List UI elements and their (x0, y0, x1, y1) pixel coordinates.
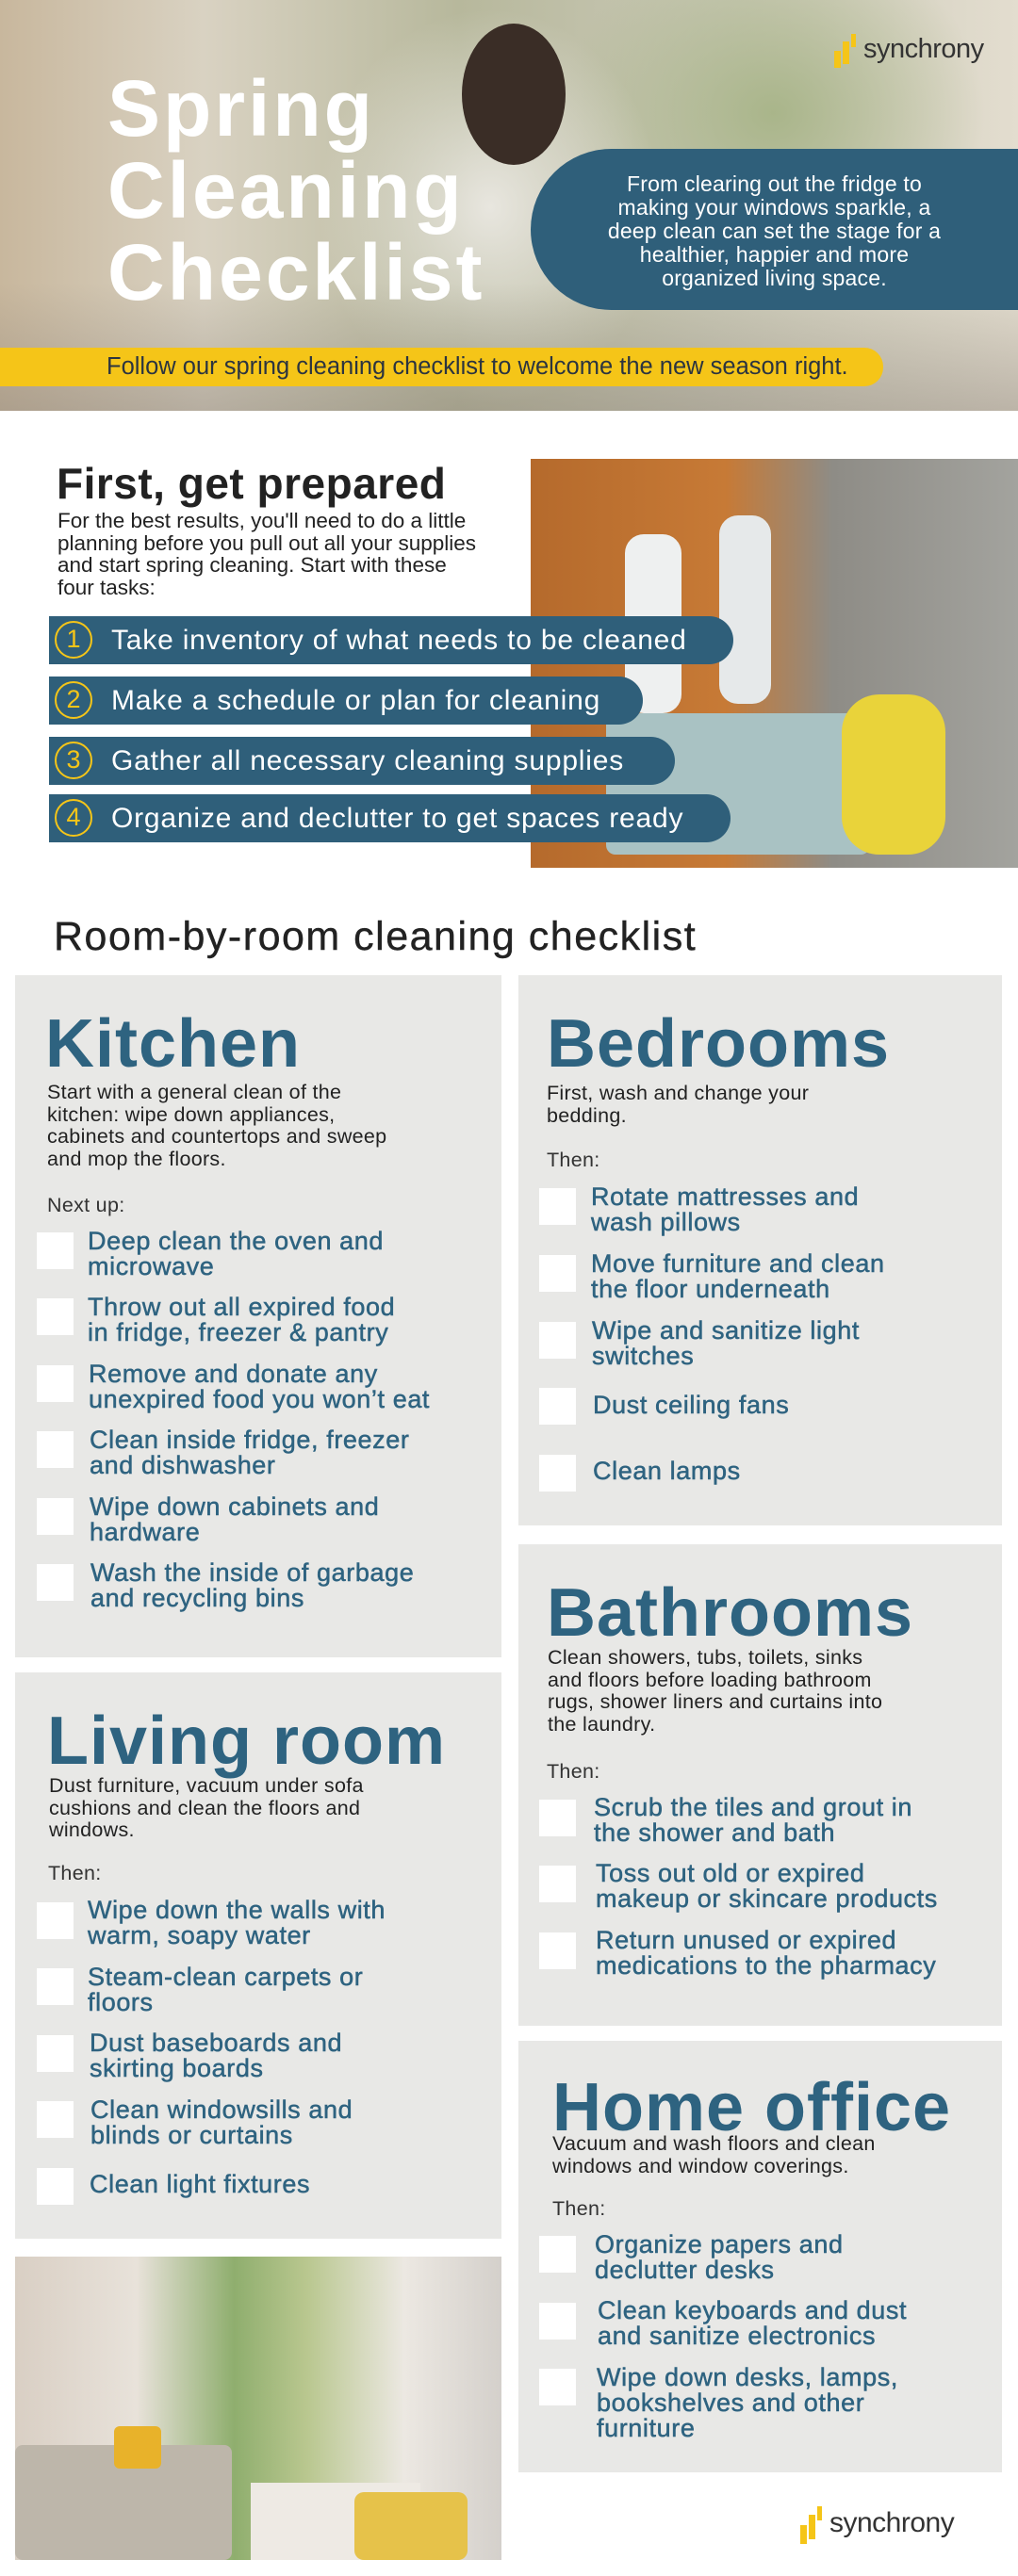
task 1 (49, 616, 733, 664)
yellow banner (0, 348, 883, 386)
logo: synchrony bottom: synchrony (829, 2507, 954, 2538)
task 2: 2 (66, 685, 81, 713)
panel: bedrooms: the floor underneath (591, 1275, 830, 1303)
task 4: 4 (66, 803, 81, 831)
text: prep intro: planning before you pull out all your supplies (57, 531, 476, 554)
panel: living room: Then: (48, 1862, 101, 1884)
panel: bathrooms: Return unused or expired (596, 1926, 896, 1954)
title: Cleaning (107, 146, 465, 235)
panel: bathrooms: Toss out old or expired (596, 1859, 864, 1887)
panel: kitchen: Next up: (47, 1194, 124, 1216)
photo: living room (15, 2257, 501, 2560)
panel: bedrooms (518, 975, 1002, 1525)
task 1: Take inventory of what needs to be cleaned (111, 625, 687, 656)
panel: home office: declutter desks (595, 2256, 775, 2284)
panel: kitchen: in fridge, freezer & pantry (88, 1318, 388, 1346)
panel: kitchen: Remove and donate any (89, 1360, 378, 1388)
logo: synchrony top: synchrony (863, 34, 984, 64)
panel: home office: Vacuum and wash floors and clean (552, 2132, 876, 2155)
panel: home office: Then: (552, 2197, 605, 2220)
panel: bedrooms: Clean lamps (593, 1457, 741, 1485)
panel: bedrooms: First, wash and change your (547, 1082, 809, 1104)
task 4: Organize and declutter to get spaces ready (111, 803, 683, 834)
panel: bedrooms: Rotate mattresses and (591, 1182, 859, 1211)
yellow banner: Follow our spring cleaning checklist to welcome the new season right. (107, 353, 848, 380)
panel: kitchen: Wipe down cabinets and (90, 1492, 379, 1521)
panel: kitchen: Wash the inside of garbage (90, 1558, 414, 1587)
callout: intro: healthier, happier and more (640, 242, 909, 267)
task 3 (49, 737, 675, 785)
callout: intro: making your windows sparkle, a (618, 195, 930, 220)
panel: kitchen: Start with a general clean of the (47, 1081, 341, 1103)
panel: bathrooms (518, 1544, 1002, 2026)
panel: bedrooms: switches (592, 1342, 694, 1370)
panel: living room: Steam-clean carpets or (88, 1963, 363, 1991)
panel: kitchen: cabinets and countertops and sweep (47, 1125, 386, 1148)
panel: bathrooms: Bathrooms (547, 1575, 913, 1651)
panel: home office: Home office (552, 2070, 951, 2145)
panel: living room: blinds or curtains (90, 2121, 293, 2149)
callout: intro: deep clean can set the stage for a (608, 219, 941, 243)
panel: kitchen: and dishwasher (90, 1451, 276, 1479)
panel: home office: bookshelves and other (597, 2389, 864, 2417)
panel: living room: Living room (47, 1704, 446, 1779)
callout: intro: From clearing out the fridge to (627, 171, 922, 196)
panel: living room: Wipe down the walls with (88, 1896, 386, 1924)
text: prep intro (57, 509, 476, 599)
panel: home office: furniture (597, 2414, 695, 2442)
callout: intro (531, 149, 1018, 310)
panel: kitchen: Throw out all expired food (88, 1293, 395, 1321)
callout: intro: organized living space. (662, 266, 887, 290)
task 3: Gather all necessary cleaning supplies (111, 745, 624, 776)
panel: bedrooms: Wipe and sanitize light (592, 1316, 860, 1345)
panel: home office: Clean keyboards and dust (598, 2296, 907, 2324)
panel: home office (518, 2041, 1002, 2472)
panel: bathrooms: the laundry. (548, 1713, 655, 1736)
heading: first get prepared: First, get prepared (57, 459, 446, 508)
panel: bathrooms: and floors before loading bathroom (548, 1668, 872, 1690)
panel: bedrooms: Move furniture and clean (591, 1249, 885, 1278)
panel: bathrooms: Clean showers, tubs, toilets, sinks (548, 1646, 862, 1669)
text: prep intro: four tasks: (57, 575, 156, 599)
panel: kitchen: and recycling bins (90, 1584, 304, 1612)
text: prep intro: and start spring cleaning. Start with these (57, 553, 447, 577)
panel: kitchen: kitchen: wipe down appliances, (47, 1102, 335, 1125)
panel: kitchen: Clean inside fridge, freezer (90, 1426, 409, 1454)
title: Checklist (107, 228, 484, 317)
panel: kitchen: unexpired food you won’t eat (89, 1385, 430, 1413)
panel: living room: cushions and clean the floors and (49, 1796, 360, 1818)
panel: living room: floors (88, 1988, 154, 2016)
panel: bedrooms: wash pillows (591, 1208, 741, 1236)
panel: living room: Clean light fixtures (90, 2170, 310, 2198)
panel: living room: warm, soapy water (88, 1921, 311, 1949)
panel: kitchen (15, 975, 501, 1657)
panel: living room: skirting boards (90, 2054, 264, 2082)
heading: room by room: Room-by-room cleaning checklist (54, 914, 697, 959)
panel: kitchen: Deep clean the oven and (88, 1227, 384, 1255)
panel: home office: and sanitize electronics (598, 2322, 876, 2350)
panel: home office: Organize papers and (595, 2230, 844, 2258)
panel: bathrooms: Then: (547, 1760, 599, 1783)
title: Spring (107, 64, 375, 153)
panel: bedrooms: Dust ceiling fans (593, 1391, 789, 1419)
panel: living room: windows. (49, 1818, 135, 1841)
panel: home office: windows and window coverings. (552, 2154, 849, 2177)
panel: bathrooms: the shower and bath (594, 1818, 835, 1847)
panel: bathrooms: makeup or skincare products (596, 1884, 938, 1913)
task 3: 3 (66, 745, 81, 774)
panel: kitchen: and mop the floors. (47, 1148, 226, 1170)
panel: living room: Dust baseboards and (90, 2029, 342, 2057)
panel: living room: Clean windowsills and (90, 2095, 353, 2124)
logo: synchrony bottom (800, 2506, 955, 2544)
task 2: Make a schedule or plan for cleaning (111, 685, 600, 716)
panel: living room (15, 1672, 501, 2239)
title (107, 64, 484, 317)
panel: bedrooms: Bedrooms (547, 1006, 890, 1082)
panel: bedrooms: bedding. (547, 1104, 627, 1127)
panel: bedrooms: Then: (547, 1149, 599, 1171)
panel: kitchen: Kitchen (45, 1006, 301, 1082)
panel: kitchen: hardware (90, 1518, 200, 1546)
header photo background (0, 0, 1018, 411)
task 2 (49, 677, 643, 725)
photo: cleaning supplies (531, 459, 1018, 868)
panel: home office: Wipe down desks, lamps, (597, 2363, 898, 2391)
panel: bathrooms: medications to the pharmacy (596, 1951, 936, 1980)
panel: living room: Dust furniture, vacuum under sofa (49, 1774, 364, 1797)
task 1: 1 (66, 625, 81, 653)
task 4 (49, 794, 731, 842)
panel: kitchen: microwave (88, 1252, 214, 1280)
panel: bathrooms: Scrub the tiles and grout in (594, 1793, 912, 1821)
panel: bathrooms: rugs, shower liners and curtains into (548, 1690, 882, 1713)
text: prep intro: For the best results, you'll need to do a little (57, 509, 466, 532)
